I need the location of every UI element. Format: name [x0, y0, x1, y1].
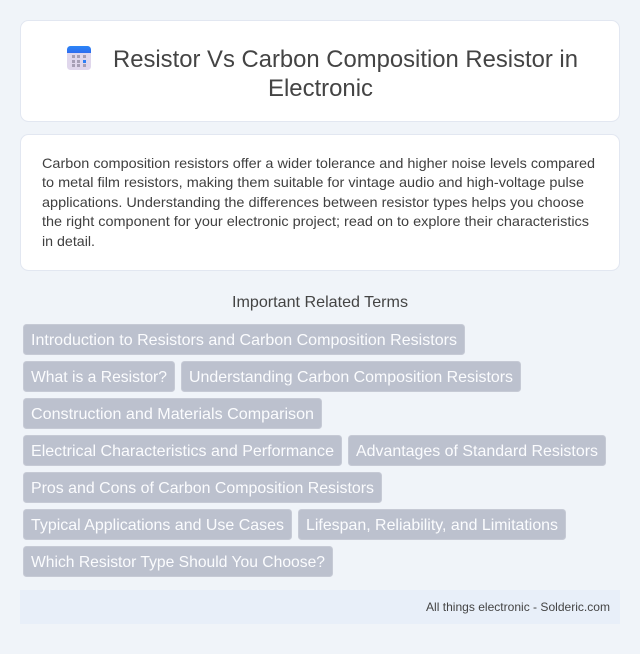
tag: Understanding Carbon Composition Resistors — [189, 369, 513, 386]
heading: related terms: Important Related Terms — [232, 294, 408, 311]
tag — [24, 398, 322, 428]
tag — [182, 362, 520, 392]
tag: Introduction to Resistors and Carbon Composition Resistors — [31, 332, 457, 349]
tag: Lifespan, Reliability, and Limitations — [306, 517, 558, 534]
title: Electronic — [268, 75, 373, 102]
tag: Electrical Characteristics and Performance — [31, 443, 334, 460]
tag — [24, 472, 382, 502]
tag: Advantages of Standard Resistors — [356, 443, 598, 460]
tag — [298, 510, 566, 540]
text block: description: in detail. — [42, 233, 95, 249]
tag — [24, 436, 342, 466]
tag — [24, 324, 464, 354]
tag — [24, 362, 174, 392]
text block: description: applications. Understanding the differences between resistor types helps you choose — [42, 194, 584, 210]
panel: terms — [24, 324, 606, 576]
tag — [24, 510, 292, 540]
text block: description: Carbon composition resistors offer a wider tolerance and higher noise levels compared — [42, 155, 595, 171]
tag: Pros and Cons of Carbon Composition Resistors — [31, 480, 374, 497]
tag: Typical Applications and Use Cases — [31, 517, 284, 534]
tag: What is a Resistor? — [31, 369, 167, 386]
title: Resistor Vs Carbon Composition Resistor in — [113, 46, 578, 73]
tag — [348, 436, 606, 466]
footer: All things electronic - Solderic.com — [426, 600, 610, 614]
panel: description — [20, 134, 620, 270]
icon: calendar — [67, 46, 91, 70]
tag: Construction and Materials Comparison — [31, 406, 314, 423]
footer — [20, 590, 620, 624]
tag: Which Resistor Type Should You Choose? — [31, 554, 325, 571]
panel: header — [20, 20, 620, 122]
text block: description: the right component for your electronic project; read on to explore their characteristics — [42, 213, 589, 229]
text block: description: to metal film resistors, making them suitable for vintage audio and high-voltage pulse — [42, 174, 584, 190]
tag — [24, 546, 332, 576]
